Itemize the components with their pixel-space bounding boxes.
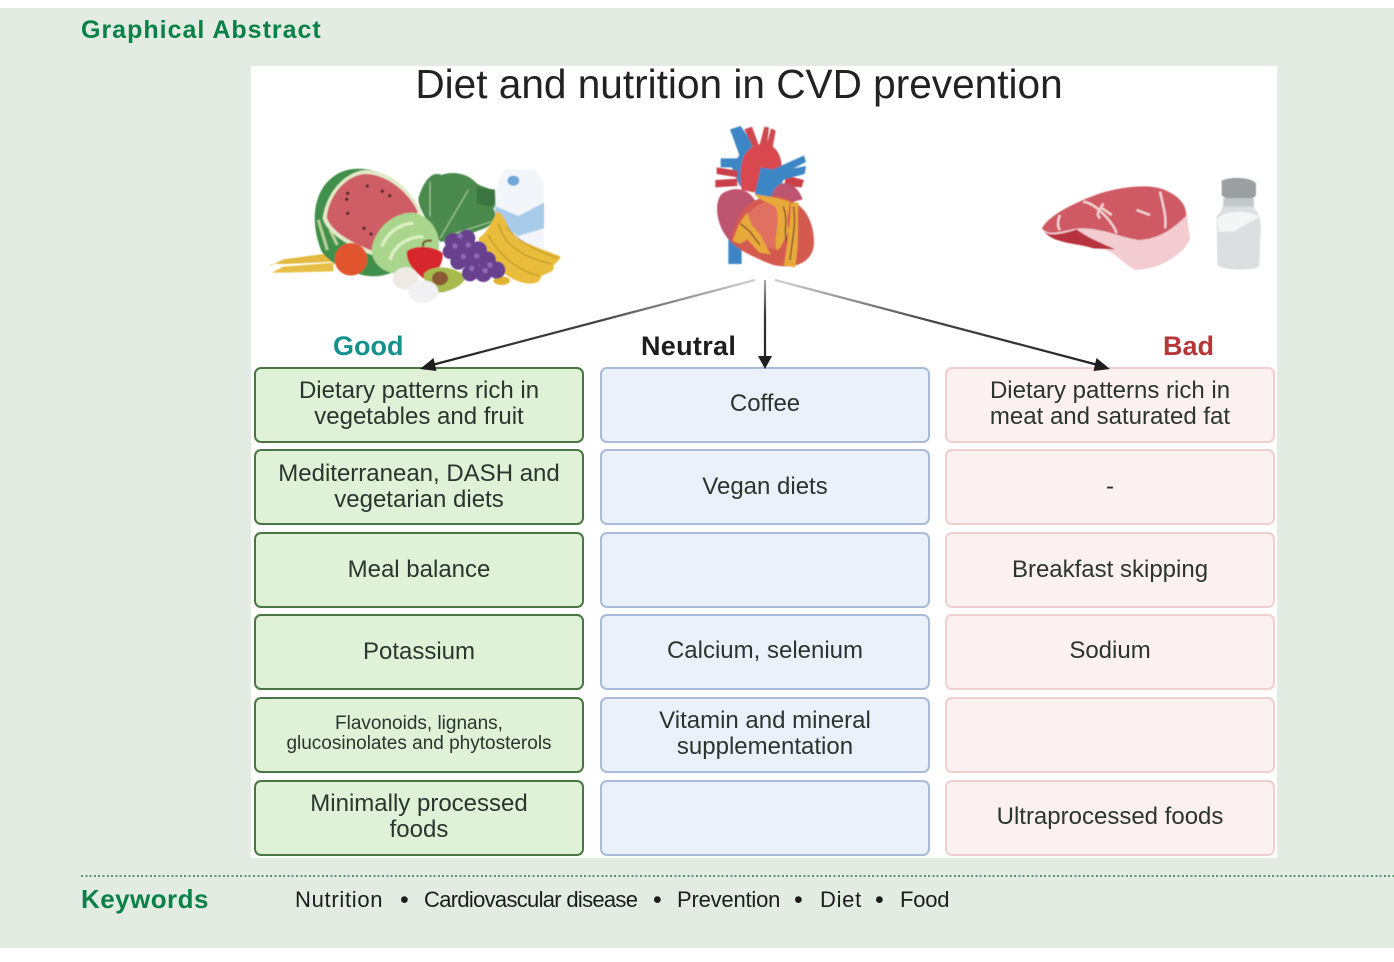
bad box 4: [945, 614, 1275, 690]
neutral box 4: [600, 614, 930, 690]
good box 5: [254, 697, 584, 773]
bad box 5: [945, 697, 1275, 773]
bad box 4: Sodium: [1069, 637, 1151, 664]
arrow: heart to good: [420, 280, 755, 371]
neutral box 5: Vitamin and mineral: [659, 706, 871, 734]
bad box 3: Breakfast skipping: [1012, 556, 1208, 583]
neutral box 2: [600, 449, 930, 525]
good box 2: [254, 449, 584, 525]
heading: Neutral: Neutral: [641, 331, 736, 361]
neutral box 1: [600, 367, 930, 443]
good box 1: vegetables and fruit: [314, 403, 524, 430]
keywords list: Food: [900, 887, 949, 912]
keywords list: Prevention: [677, 887, 780, 912]
bad box 1: meat and saturated fat: [990, 403, 1230, 430]
good box 3: [254, 532, 584, 608]
keywords list: Diet: [820, 887, 862, 912]
keywords list: •: [653, 886, 662, 914]
neutral box 1: Coffee: [730, 390, 800, 417]
bad box 6: Ultraprocessed foods: [997, 803, 1223, 830]
good box 2: Mediterranean, DASH and: [278, 460, 560, 486]
good box 1: Dietary patterns rich in: [299, 376, 539, 404]
bad box 6: [945, 780, 1275, 856]
icon: healthy foods: [270, 169, 561, 303]
heading: Graphical Abstract: Graphical Abstract: [81, 16, 322, 44]
bad box 1: Dietary patterns rich in: [990, 376, 1230, 404]
good box 4: Potassium: [363, 638, 475, 665]
heading: Bad: Bad: [1163, 331, 1214, 361]
good box 1: [254, 367, 584, 443]
bad box 1: [945, 367, 1275, 443]
arrow: heart to neutral: [758, 280, 772, 369]
good box 5: Flavonoids, lignans,: [335, 713, 503, 734]
keywords list: •: [400, 886, 409, 914]
icon: meat and salt: [1042, 178, 1261, 270]
title: Diet and nutrition in CVD prevention: [415, 61, 1063, 107]
neutral box 5: [600, 697, 930, 773]
neutral box 5: supplementation: [677, 733, 853, 760]
keywords list: •: [875, 886, 884, 914]
icon: heart: [715, 126, 814, 267]
arrow: heart to bad: [775, 280, 1110, 371]
good box 3: Meal balance: [348, 556, 490, 583]
bad box 2: [945, 449, 1275, 525]
good box 4: [254, 614, 584, 690]
keywords label: Keywords: [81, 884, 209, 914]
neutral box 3: [600, 532, 930, 608]
neutral box 6: [600, 780, 930, 856]
neutral box 4: Calcium, selenium: [667, 637, 863, 664]
good box 6: Minimally processed: [310, 790, 528, 816]
heading: Good: Good: [333, 331, 403, 361]
keywords list: [295, 886, 949, 914]
bad box 3: [945, 532, 1275, 608]
keywords list: Cardiovascular disease: [424, 887, 637, 912]
bad box 2: -: [1106, 473, 1114, 500]
neutral box 2: Vegan diets: [702, 473, 828, 500]
panel: diet chart background: [251, 66, 1277, 858]
good box 6: [254, 780, 584, 856]
good box 5: glucosinolates and phytosterols: [286, 733, 552, 754]
good box 6: foods: [390, 816, 448, 843]
keywords list: Nutrition: [295, 887, 383, 912]
good box 2: vegetarian diets: [334, 486, 504, 513]
keywords list: •: [794, 886, 803, 914]
